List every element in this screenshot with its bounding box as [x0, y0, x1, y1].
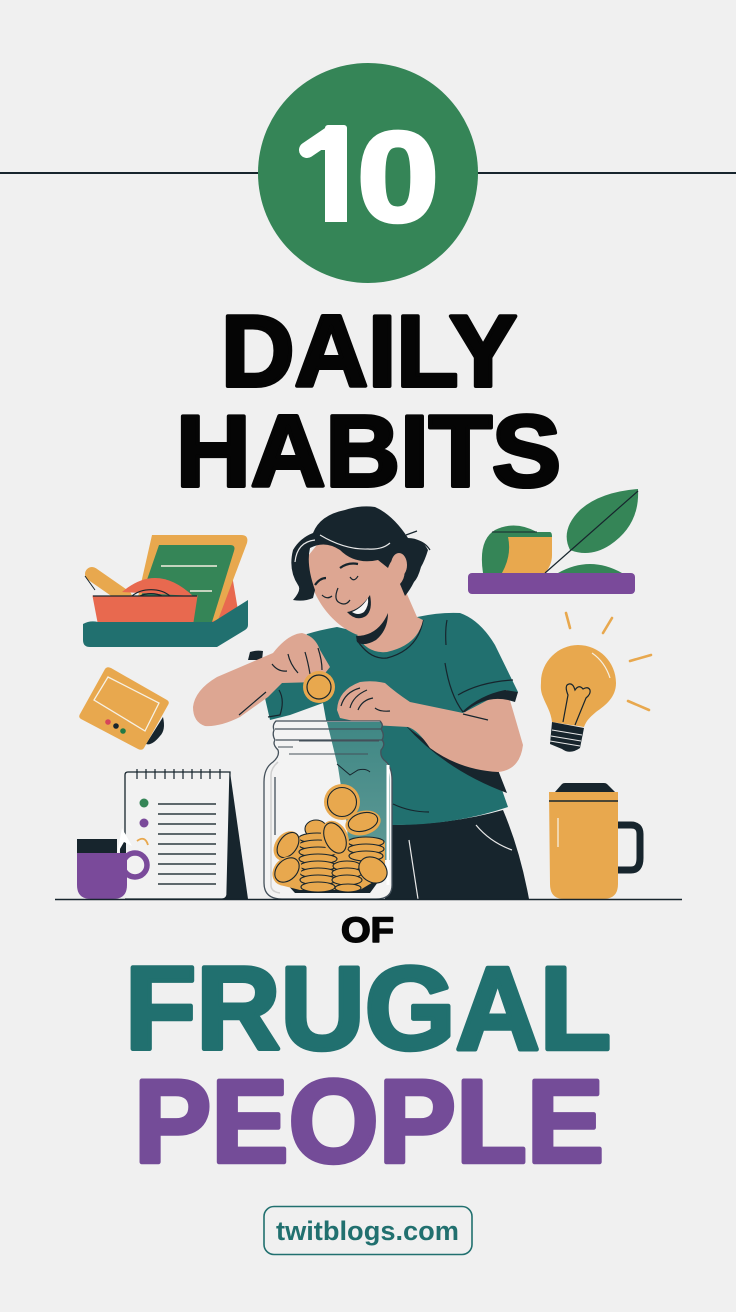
left arm [248, 651, 263, 660]
illustration: purple mug [77, 828, 147, 899]
shadow under arm [405, 725, 507, 793]
illustration: person [193, 506, 529, 899]
number badge: 10 [258, 63, 478, 283]
pants [385, 810, 529, 899]
title: DAILY HABITS: HABITS [176, 396, 561, 508]
illustration: light bulb [541, 613, 651, 752]
table line [55, 898, 682, 900]
illustration: tilted card [79, 667, 169, 750]
title: FRUGAL PEOPLE [125, 943, 611, 1188]
number badge: 10: 1 [297, 105, 368, 248]
title: FRUGAL PEOPLE: PEOPLE [134, 1056, 604, 1188]
illustration: lunch box [83, 535, 248, 647]
illustration: travel mug [549, 783, 640, 899]
illustration: plant shelf [468, 489, 638, 594]
word: OF: OF [341, 911, 394, 950]
rays [566, 613, 651, 710]
coin in hand [303, 671, 335, 703]
title: DAILY HABITS [176, 296, 561, 508]
jar outline [264, 721, 392, 899]
head [308, 530, 410, 636]
title: FRUGAL PEOPLE: FRUGAL [125, 943, 611, 1075]
coins [285, 882, 378, 893]
illustration: glass jar with coins [264, 721, 392, 899]
right arm [337, 681, 523, 772]
hair [291, 506, 428, 601]
t-shirt [262, 613, 518, 825]
face [315, 564, 358, 585]
beard shadow [356, 613, 388, 644]
jar glass [264, 721, 392, 899]
number badge: 10: 0 [357, 106, 439, 249]
title: DAILY HABITS: DAILY [221, 296, 517, 408]
footer url pill: twitblogs.com [276, 1216, 459, 1246]
neck [357, 585, 423, 652]
illustration: desk calendar [125, 769, 248, 899]
footer url pill [264, 1206, 472, 1254]
ear [391, 553, 407, 577]
